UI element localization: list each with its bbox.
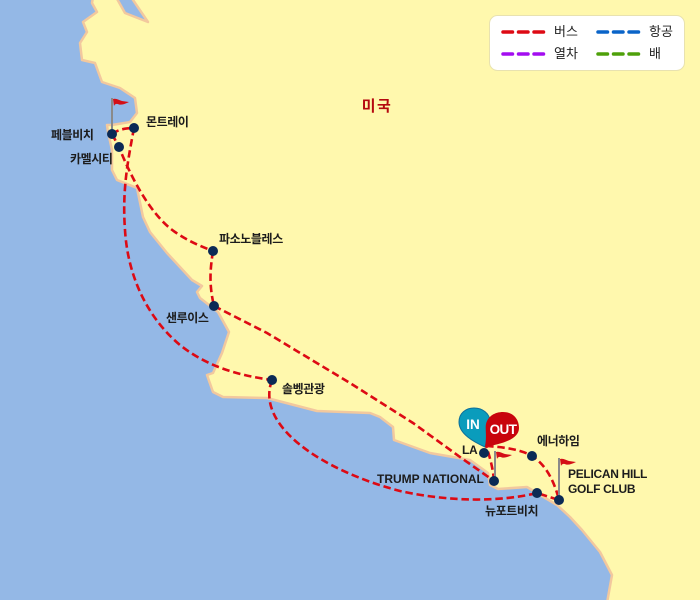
- stop labels: TRUMP NATIONAL: [377, 472, 484, 486]
- legend: bus: 버스: [554, 24, 578, 39]
- stop labels: 카멜시티: [70, 151, 113, 166]
- legend: [490, 16, 684, 70]
- stop labels: 몬트레이: [146, 114, 189, 129]
- stop labels: [51, 114, 647, 518]
- stop labels: PELICAN HILL: [568, 467, 647, 481]
- legend: ship: [598, 46, 661, 61]
- stop labels: 페블비치: [51, 128, 94, 142]
- pin: OUT: OUT: [490, 422, 518, 437]
- legend: train: [503, 46, 578, 61]
- stop labels: GOLF CLUB: [568, 482, 636, 496]
- flag: Trump National: [494, 451, 512, 481]
- country label: 미국: [362, 98, 392, 115]
- stop markers: [107, 123, 564, 505]
- stop labels: 솔벵관광: [282, 382, 325, 396]
- stop labels: 에너하임: [537, 434, 580, 448]
- legend: ship: 배: [649, 46, 661, 61]
- pin: IN: [459, 408, 490, 447]
- stop labels: LA: [462, 443, 478, 457]
- stop labels: 샌루이스: [166, 311, 209, 325]
- legend: air: 항공: [649, 24, 673, 39]
- stop labels: 뉴포트비치: [485, 504, 538, 518]
- pin: OUT: [485, 412, 519, 447]
- route: bus (red dashed): [112, 128, 559, 500]
- legend: bus: [503, 24, 578, 39]
- flag: Pebble Beach: [111, 98, 129, 134]
- legend: train: 열차: [554, 46, 578, 61]
- pin: IN: IN: [466, 417, 480, 432]
- flag: Pelican Hill: [558, 458, 576, 500]
- stop labels: 파소노블레스: [219, 231, 283, 246]
- legend: air: [598, 24, 673, 39]
